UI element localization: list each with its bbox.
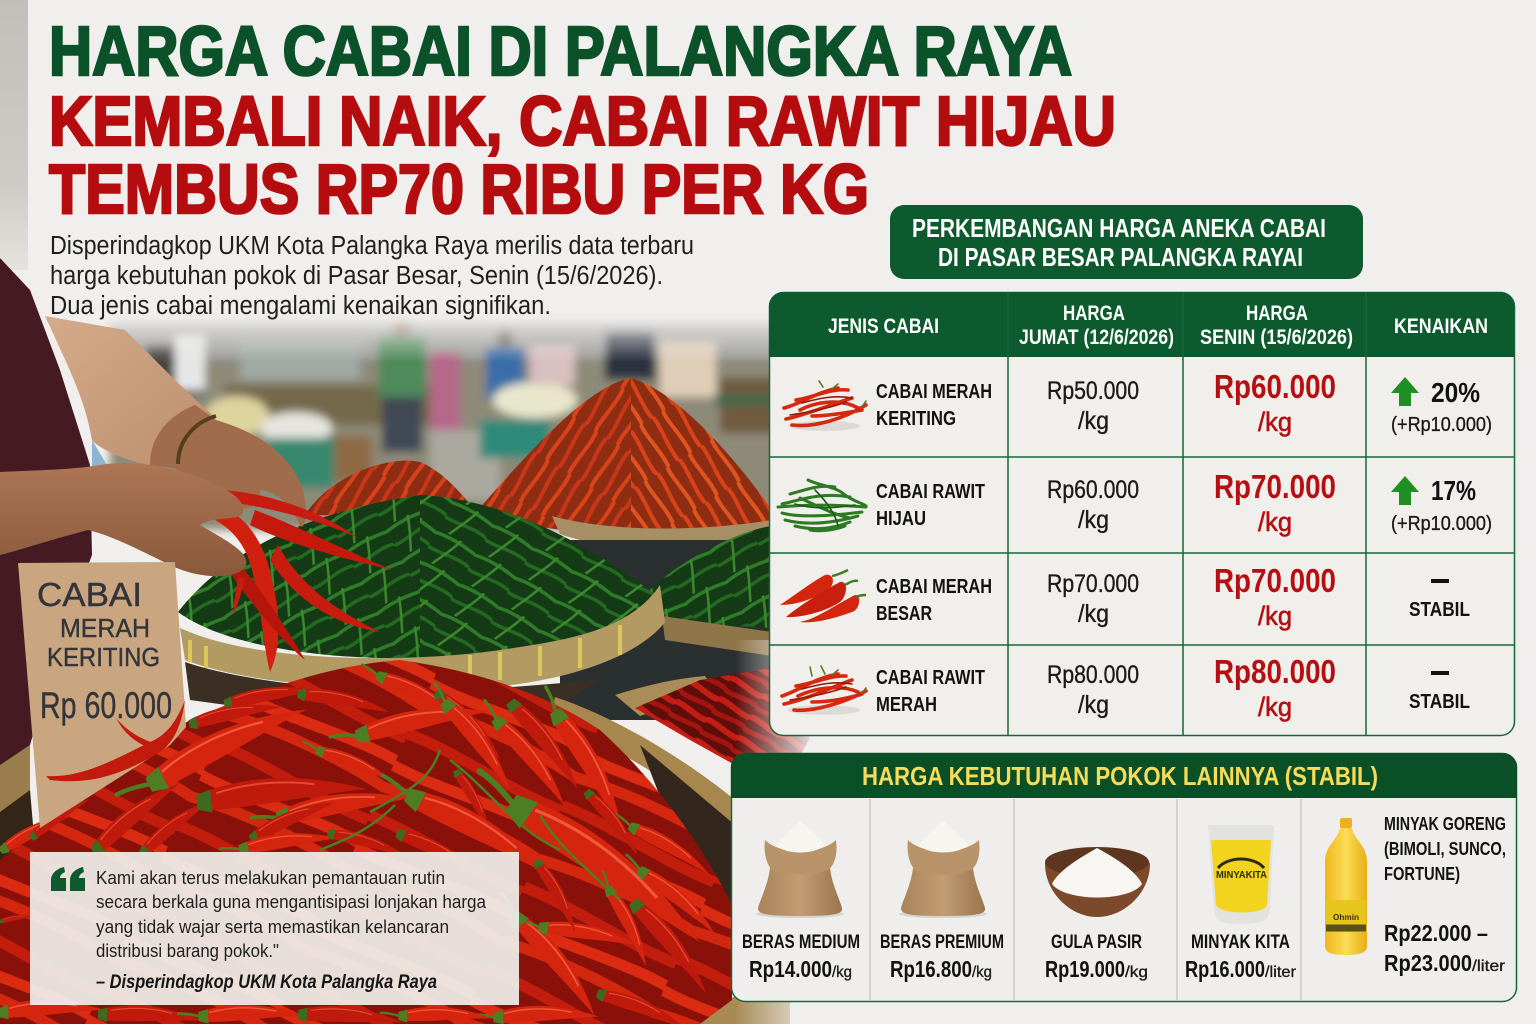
intro paragraph: harga kebutuhan pokok di Pasar Besar, Senin (15/6/2026). — [50, 262, 663, 290]
table header row: JENIS CABAI — [828, 315, 939, 338]
icon: green chilies — [778, 480, 866, 531]
row: cabai merah keriting: KERITING — [876, 407, 956, 430]
central green chili heap — [178, 495, 660, 658]
quote box — [30, 852, 519, 1005]
row: cabai rawit hijau: /kg — [1258, 507, 1292, 537]
table header row: HARGA — [1063, 302, 1125, 325]
row: cabai merah keriting: /kg — [1078, 407, 1109, 435]
row: cabai rawit merah: /kg — [1078, 691, 1109, 719]
item: beras medium: /kg — [832, 964, 852, 981]
item: gula pasir: GULA PASIR — [1051, 931, 1142, 953]
row: cabai merah besar: Rp70.000 — [1214, 562, 1336, 599]
bottom right basket rim — [695, 982, 790, 1024]
row: cabai merah keriting: 20% — [1431, 377, 1480, 408]
item: minyak goreng: Rp23.000 — [1384, 950, 1472, 976]
main title — [49, 12, 1116, 228]
price table — [769, 292, 1514, 736]
item: gula pasir: /kg — [1125, 964, 1148, 981]
table heading banner — [890, 205, 1363, 279]
row: cabai rawit merah: STABIL — [1409, 690, 1470, 713]
table heading banner: DI PASAR BESAR PALANGKA RAYAI — [938, 242, 1303, 272]
row: cabai merah besar: BESAR — [876, 602, 932, 625]
row: cabai rawit merah: MERAH — [876, 693, 937, 716]
row: cabai rawit merah: CABAI RAWIT — [876, 666, 985, 689]
quote text: Kami akan terus melakukan pemantauan rutin — [96, 867, 445, 888]
handful of red chilies — [195, 490, 392, 672]
grey left edge strip — [0, 0, 28, 270]
row: cabai merah keriting: CABAI MERAH — [876, 380, 992, 403]
central basket rim — [180, 585, 665, 690]
quote attribution: – Disperindagkop UKM Kota Palangka Raya — [96, 972, 437, 993]
item: beras medium — [742, 821, 860, 982]
item: beras premium — [880, 821, 1004, 982]
icon: large red chilies — [780, 570, 866, 622]
row: cabai merah keriting: /kg — [1258, 407, 1292, 437]
item: beras medium: Rp14.000 — [749, 956, 832, 982]
table header row: JUMAT (12/6/2026) — [1019, 326, 1174, 349]
blurred market background — [110, 318, 780, 530]
icon: curly red chilies — [784, 381, 866, 431]
icon: quotation mark — [51, 867, 85, 891]
row: cabai rawit merah — [782, 653, 1470, 722]
row: cabai rawit merah: Rp80.000 — [1047, 661, 1139, 689]
row: cabai merah keriting: Rp60.000 — [1214, 368, 1336, 405]
chilies in front of sign — [46, 700, 185, 781]
item: minyak kita: MINYAK KITA — [1191, 931, 1290, 953]
row: cabai merah besar: /kg — [1258, 601, 1292, 631]
table header row — [769, 292, 1514, 357]
row: cabai merah besar: CABAI MERAH — [876, 575, 992, 598]
stable dash — [1431, 579, 1449, 583]
dark basket interior — [640, 745, 735, 910]
icon: oil bottle — [1325, 818, 1367, 955]
panel: other staple prices — [731, 753, 1517, 1002]
item: gula pasir: Rp19.000 — [1045, 956, 1125, 982]
item: beras premium: BERAS PREMIUM — [880, 931, 1004, 953]
dark stand backdrop — [560, 540, 780, 720]
panel header — [731, 753, 1517, 798]
icon: rice sack — [899, 821, 987, 918]
seller peach sleeve — [45, 316, 212, 465]
lower basket rim right — [550, 697, 735, 830]
icon: rice sack — [756, 821, 844, 918]
item: minyak goreng: Rp22.000 – — [1384, 920, 1488, 946]
top fade into page — [28, 300, 798, 362]
icon: small red chilies — [782, 666, 866, 715]
lower arm and hand — [0, 463, 246, 576]
row: cabai rawit merah: Rp80.000 — [1214, 653, 1336, 690]
price sign — [18, 562, 186, 828]
basket gap shadow — [185, 662, 600, 715]
row: cabai rawit hijau: 17% — [1431, 475, 1476, 506]
item: minyak kita: /liter — [1265, 964, 1297, 981]
icon: oil bottle: Ohmin — [1333, 913, 1359, 922]
item: beras premium: Rp16.800 — [890, 956, 972, 982]
table header row: HARGA — [1246, 302, 1308, 325]
row: cabai rawit hijau: HIJAU — [876, 507, 926, 530]
main title: TEMBUS RP70 RIBU PER KG — [49, 150, 869, 228]
right edge fade — [735, 640, 820, 1024]
panel header: HARGA KEBUTUHAN POKOK LAINNYA (STABIL) — [862, 761, 1378, 791]
icon: oil pouch: MINYAKITA — [1216, 870, 1267, 881]
icon: up arrow — [1391, 476, 1419, 505]
main title: KEMBALI NAIK, CABAI RAWIT HIJAU — [49, 82, 1116, 160]
intro paragraph — [50, 232, 694, 320]
upper arm and hand — [150, 405, 306, 527]
rear red chili heap — [305, 461, 478, 515]
row: cabai merah keriting: Rp50.000 — [1047, 377, 1139, 405]
seller maroon shirt — [0, 258, 92, 765]
row: cabai rawit merah: /kg — [1258, 692, 1292, 722]
row: cabai rawit hijau: Rp60.000 — [1047, 476, 1139, 504]
item: minyak kita: Rp16.000 — [1185, 956, 1265, 982]
table heading banner: PERKEMBANGAN HARGA ANEKA CABAI — [912, 213, 1326, 243]
intro paragraph: Disperindagkop UKM Kota Palangka Raya merilis data terbaru — [50, 232, 694, 260]
sky-blue gap behind arm — [92, 440, 110, 470]
table body — [770, 292, 1514, 736]
row: cabai merah keriting — [784, 368, 1492, 437]
row: cabai rawit hijau: (+Rp10.000) — [1391, 513, 1492, 535]
price sign: Rp 60.000 — [40, 685, 172, 726]
quote text: yang tidak wajar serta memastikan kelancaran — [96, 916, 449, 937]
row: cabai rawit hijau — [778, 468, 1492, 537]
row: cabai merah besar: /kg — [1078, 600, 1109, 628]
icon: oil pouch — [1208, 825, 1274, 924]
row: cabai rawit hijau: /kg — [1078, 506, 1109, 534]
table header row: KENAIKAN — [1394, 315, 1488, 338]
row: cabai merah besar — [780, 562, 1470, 631]
row: cabai merah besar: Rp70.000 — [1047, 570, 1139, 598]
left basket — [0, 735, 30, 815]
item: beras premium: /kg — [972, 964, 992, 981]
quote text — [96, 867, 487, 961]
market photo — [0, 258, 820, 1024]
quote text: secara berkala guna mengantisipasi lonjakan harga — [96, 891, 487, 912]
item: minyak goreng — [1325, 813, 1506, 976]
main red chili pile — [0, 659, 732, 1024]
rear basket under orange heap — [552, 516, 772, 551]
row: cabai merah besar: STABIL — [1409, 598, 1470, 621]
bracelet — [178, 416, 216, 464]
price sign: MERAH — [60, 613, 150, 643]
right basket rim — [662, 616, 772, 656]
row: cabai rawit hijau: Rp70.000 — [1214, 468, 1336, 505]
price sign: CABAI — [37, 576, 142, 613]
table header row: SENIN (15/6/2026) — [1200, 326, 1353, 349]
row: cabai rawit hijau: CABAI RAWIT — [876, 480, 985, 503]
icon: up arrow — [1391, 377, 1419, 406]
price sign: KERITING — [47, 642, 160, 672]
orange chili heap — [478, 378, 772, 531]
item: minyak goreng: (BIMOLI, SUNCO, — [1384, 838, 1506, 859]
row: cabai merah keriting: (+Rp10.000) — [1391, 414, 1492, 436]
item: minyak goreng: FORTUNE) — [1384, 863, 1460, 884]
intro paragraph: Dua jenis cabai mengalami kenaikan signifikan. — [50, 292, 551, 320]
main title: HARGA CABAI DI PALANGKA RAYA — [49, 12, 1072, 90]
item: gula pasir — [1045, 847, 1150, 982]
item: minyak goreng: /liter — [1472, 958, 1506, 975]
item: minyak kita — [1185, 825, 1297, 982]
right green heap — [650, 526, 772, 628]
item: beras medium: BERAS MEDIUM — [742, 931, 860, 953]
right rear basket and red chilies — [615, 668, 810, 765]
stable dash — [1431, 671, 1449, 675]
icon: sugar bowl — [1045, 847, 1150, 917]
quote text: distribusi barang pokok." — [96, 940, 279, 961]
